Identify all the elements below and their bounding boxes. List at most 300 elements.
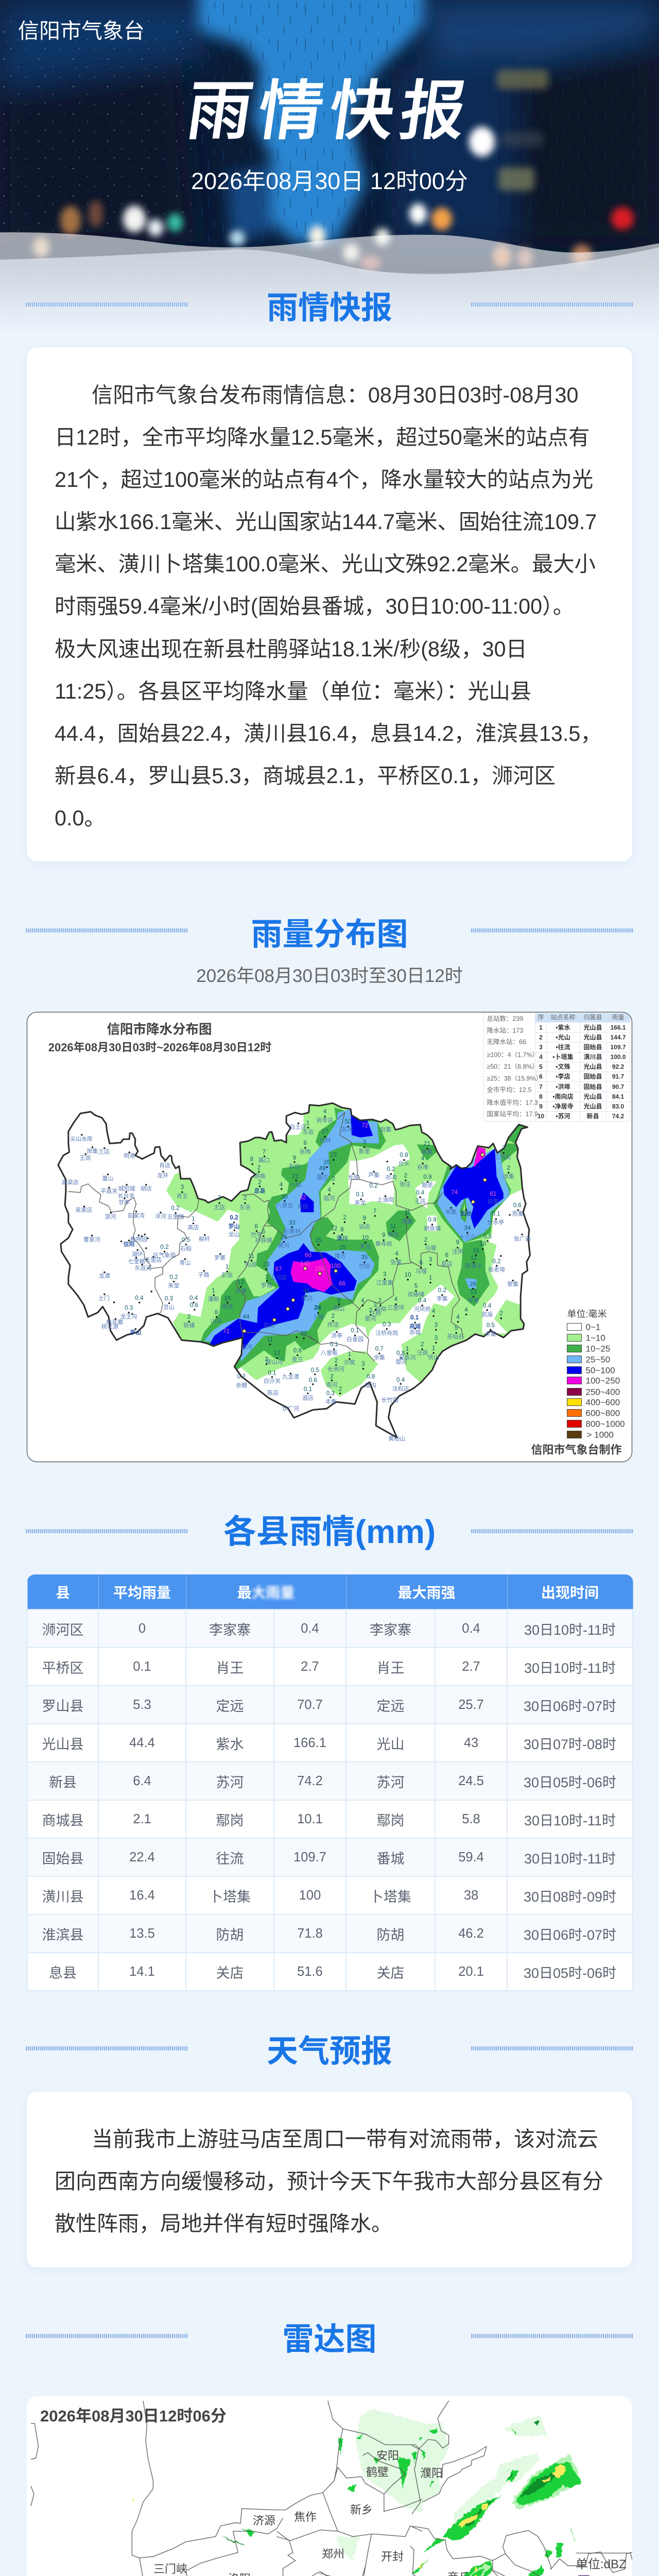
station names: 余集 — [373, 1353, 385, 1361]
station rainfall values: 12 — [331, 1225, 337, 1231]
table: county rainfall: 固始县 — [42, 1851, 83, 1866]
station names: 铁铺 — [183, 1321, 195, 1328]
rainfall legend — [567, 1309, 625, 1439]
table: county rainfall: 74.2 — [297, 1773, 323, 1788]
station rainfall values: 0.8 — [367, 1373, 375, 1380]
station names: 汪岗 — [417, 1349, 428, 1356]
station rainfall values: 0.1 — [410, 1314, 419, 1320]
rain report paragraph: 0.0。 — [55, 806, 106, 830]
station names: 王店 — [414, 1197, 426, 1205]
station names: 苏河 — [241, 1343, 252, 1350]
station names: 城阳城 — [118, 1185, 135, 1192]
rainfall legend: 250~400 — [585, 1387, 620, 1397]
rain report paragraph: 44.4，固始县22.4，潢川县16.4，息县14.2，淮滨县13.5， — [55, 722, 602, 745]
station names: 陈淋子 — [465, 1262, 482, 1269]
station ranking table: 总站数：239 — [487, 1014, 523, 1022]
station names: 张陶 — [299, 1147, 310, 1155]
station rainfall values: 0.7 — [375, 1345, 383, 1352]
station names: 新里 — [358, 1147, 370, 1154]
station rainfall values: 30 — [281, 1193, 288, 1200]
station ranking table: •文殊 — [556, 1062, 570, 1070]
station rainfall values: 4 — [421, 1155, 424, 1162]
station ranking table: 归属县 — [583, 1013, 602, 1021]
station names: 吴家店 — [75, 1206, 92, 1213]
station names: 信阳 — [123, 1240, 134, 1247]
station ranking table: 新县 — [586, 1112, 599, 1120]
station rainfall values: 0.2 — [387, 1165, 395, 1172]
station ranking table: 国家站平均：17.9 — [487, 1110, 537, 1117]
station names: 八里岔 — [276, 1202, 293, 1209]
station ranking table: 光山县 — [583, 1092, 602, 1100]
station names: 南店 — [387, 1231, 398, 1238]
table: county rainfall: 平均雨量 — [113, 1585, 171, 1600]
city labels: 三门峡 — [153, 2563, 187, 2575]
station names: 张广庙 — [514, 1234, 530, 1242]
station ranking table: 4 — [539, 1053, 543, 1060]
station names: 周集 — [402, 1217, 413, 1225]
station ranking table: •往流 — [556, 1043, 570, 1050]
table: county rainfall: 肖王 — [216, 1660, 244, 1675]
station names: 罗寨 — [214, 1254, 226, 1261]
station rainfall values: 8 — [250, 1156, 253, 1162]
station ranking table: 光山县 — [583, 1033, 602, 1041]
station names: 谈店 — [358, 1223, 370, 1230]
table: county rainfall: 30日07时-08时 — [524, 1736, 616, 1752]
heavy rain station markers — [242, 1153, 487, 1332]
station ranking table: 90.7 — [612, 1083, 624, 1090]
table: county rainfall: 大雨量 — [251, 1585, 295, 1600]
station ranking table: 9 — [539, 1103, 543, 1110]
station rainfall values: 12 — [273, 1350, 280, 1357]
station ranking table: 109.7 — [610, 1043, 626, 1050]
station rainfall values: 1 — [348, 1351, 351, 1358]
station rainfall values: 26 — [470, 1281, 476, 1287]
station rainfall values: 3 — [428, 1256, 432, 1263]
station names: 石稻 — [180, 1245, 192, 1251]
rainfall legend: 600~800 — [585, 1408, 620, 1418]
header hero: rainy night background — [0, 0, 659, 315]
rain report paragraph: 11:25）。各县区平均降水量（单位：毫米）：光山县 — [55, 680, 531, 703]
station ranking table: •卜塔集 — [552, 1053, 573, 1060]
table: county rainfall: 苏河 — [377, 1774, 405, 1790]
station rainfall values: 66 — [339, 1280, 345, 1287]
station names: 双椿铺 — [407, 1291, 424, 1298]
table: county rainfall: 出现时间 — [541, 1585, 599, 1600]
station rainfall values: 6 — [303, 1139, 307, 1146]
station names: 洋河 — [154, 1212, 166, 1219]
station ranking table: 固始县 — [583, 1072, 602, 1080]
station rainfall values: 0.9 — [423, 1173, 431, 1180]
station rainfall values: 0.3 — [125, 1304, 133, 1311]
station rainfall values: 100 — [331, 1262, 341, 1269]
station rainfall values: 0.4 — [418, 1297, 426, 1303]
station names: 湖环 — [131, 1250, 143, 1257]
station rainfall values: 0.4 — [135, 1294, 144, 1301]
table: county rainfall: 肖王 — [377, 1660, 405, 1675]
station rainfall values: 50 — [344, 1118, 352, 1125]
station rainfall values: 0.2 — [438, 1286, 446, 1293]
station names: 沙窝 — [343, 1359, 355, 1366]
forecast paragraph — [55, 2127, 603, 2235]
station names: 定远 — [263, 1321, 274, 1329]
station ranking table: 10 — [537, 1112, 544, 1120]
station rainfall values: 4 — [456, 1314, 460, 1320]
station rainfall values: 0.9 — [428, 1216, 436, 1223]
station ranking table — [483, 1013, 630, 1121]
station rainfall values: 0.4 — [189, 1294, 198, 1301]
station rainfall values: 2 — [499, 1310, 502, 1316]
station names: 陡沟 — [365, 1382, 376, 1388]
station rainfall values: 0.1 — [268, 1369, 276, 1376]
station names: 吴陈河 — [398, 1353, 415, 1361]
station rainfall values: 0.6 — [513, 1201, 521, 1208]
station rainfall values: 2 — [187, 1313, 190, 1320]
station ranking table: 固始县 — [583, 1043, 602, 1050]
city labels — [153, 2449, 470, 2576]
table: county rainfall: 定远 — [216, 1698, 244, 1714]
rain report paragraph: 毫米、潢川卜塔集100.0毫米、光山文殊92.2毫米。最大小 — [55, 552, 596, 576]
station ranking table: 雨量 — [612, 1013, 624, 1021]
station rainfall values: 60 — [305, 1252, 311, 1259]
table: county rainfall: 30日06时-07时 — [524, 1927, 616, 1942]
table: county rainfall: 淮滨县 — [42, 1927, 83, 1942]
station rainfall values: 10 — [479, 1241, 486, 1247]
station ranking table: 91.7 — [612, 1073, 624, 1080]
station rainfall values: 1 — [405, 1345, 409, 1352]
table: county rainfall: 苏河 — [216, 1774, 244, 1790]
station names: 关店 — [297, 1202, 308, 1210]
station names: 蒋集 — [421, 1148, 432, 1155]
station names: 汪桥 — [370, 1310, 381, 1316]
station names: 彭黄林 — [283, 1227, 300, 1234]
table: county rainfall: 2.7 — [301, 1659, 319, 1673]
table: county rainfall: 59.4 — [458, 1850, 484, 1864]
station rainfall values: 2 — [258, 1179, 261, 1185]
station rainfall values: 11 — [248, 1252, 254, 1259]
rain report paragraph — [55, 383, 602, 830]
map: county rainfall regions — [58, 1093, 535, 1446]
station rainfall values: 11 — [267, 1336, 273, 1343]
station rainfall values: 0.6 — [189, 1301, 198, 1308]
station names: 肖王 — [176, 1192, 187, 1199]
table: county rainfall: 关店 — [377, 1965, 405, 1980]
agency name: 信阳市气象台 — [18, 19, 145, 43]
station rainfall values: 0.4 — [396, 1376, 405, 1383]
station names: 传流 — [327, 1320, 338, 1328]
table: county rainfall: 紫水 — [216, 1736, 244, 1752]
rainfall legend: 1~10 — [585, 1333, 605, 1343]
station ranking table: 84.1 — [612, 1093, 624, 1100]
panel: forecast text — [27, 2092, 632, 2267]
table: county rainfall: 100 — [299, 1888, 321, 1902]
station names: 罗山 — [228, 1222, 239, 1229]
station ranking table: 2 — [539, 1033, 543, 1041]
station names: 九龙潭 — [282, 1374, 299, 1380]
station ranking table: •李店 — [556, 1072, 570, 1080]
station ranking table: •净居寺 — [552, 1102, 573, 1110]
station rainfall values: 8 — [340, 1226, 343, 1233]
rainfall station markers — [81, 1116, 522, 1397]
station rainfall values: 0.4 — [416, 1189, 424, 1196]
station names: 注阴 — [452, 1247, 463, 1255]
station names: 竹竿 — [250, 1231, 262, 1238]
station rainfall values: 26 — [323, 1159, 330, 1165]
table: county rainfall: 25.7 — [458, 1697, 484, 1711]
rainfall time range subtitle: 2026年08月30日03时至30日12时 — [196, 966, 463, 986]
station names: 游曲 — [254, 1173, 265, 1179]
station names: 黄河 — [278, 1242, 289, 1249]
station names: 上河店 — [270, 1273, 287, 1280]
station ranking table: 光山县 — [583, 1023, 602, 1031]
station rainfall values: 20 — [300, 1330, 307, 1337]
station names: 陈店 — [267, 1388, 279, 1396]
station rainfall values: 0.1 — [330, 1341, 338, 1347]
station names: 震庄 — [317, 1173, 328, 1180]
station names: 徐集 — [502, 1173, 514, 1180]
table: county rainfall: 30日10时-11时 — [524, 1660, 616, 1675]
station rainfall values: 2 — [330, 1373, 333, 1380]
station names: 武庙 — [481, 1310, 493, 1317]
station rainfall values: 3 — [265, 1356, 268, 1363]
station rainfall values: 2 — [217, 1194, 221, 1201]
table: county rainfall: 息县 — [49, 1965, 77, 1980]
station names: 潢川 — [336, 1234, 348, 1241]
table: county rainfall: 0 — [138, 1621, 146, 1635]
station names: 彭张 — [221, 1271, 233, 1278]
station names — [61, 1116, 530, 1442]
station rainfall values: 9 — [381, 1232, 385, 1239]
station rainfall values: 4 — [279, 1181, 283, 1188]
rain report paragraph: 山紫水166.1毫米、光山国家站144.7毫米、固始往流109.7 — [55, 510, 597, 534]
station rainfall values: 7 — [373, 1208, 376, 1214]
station names: 植物园 — [130, 1235, 147, 1242]
rainfall legend: 800~1000 — [585, 1419, 625, 1429]
station rainfall values: 4 — [431, 1308, 435, 1314]
station rainfall values: 24 — [314, 1304, 321, 1311]
station rainfall values: 8 — [214, 1309, 218, 1315]
table: county rainfall: 鄢岗 — [216, 1812, 244, 1828]
station rainfall values: 1 — [428, 1274, 432, 1281]
table: county rainfall: 光山 — [377, 1736, 405, 1752]
station rainfall values: 34 — [464, 1224, 471, 1231]
station ranking table: 166.1 — [610, 1024, 626, 1031]
station ranking table: ≥50：21（8.8%） — [487, 1063, 539, 1070]
station rainfall values — [125, 1108, 521, 1396]
station rainfall values: 9 — [362, 1214, 366, 1221]
station rainfall values: 2 — [334, 1357, 338, 1364]
table: county rainfall: 46.2 — [458, 1926, 484, 1940]
station rainfall values: 0.2 — [230, 1214, 238, 1221]
table: county rainfall: 往流 — [216, 1851, 244, 1866]
table: county rainfall: 43 — [464, 1735, 478, 1750]
station names: 东岳 — [239, 1204, 251, 1210]
station names: 长台关 — [117, 1192, 134, 1199]
station names: 李集 — [436, 1295, 447, 1302]
table: county rainfall: 平桥区 — [42, 1660, 83, 1675]
station names: 游河 — [105, 1213, 116, 1220]
heading: rain report: 雨情快报 — [267, 290, 392, 325]
table: county rainfall: 10.1 — [297, 1811, 323, 1826]
station names: 孙铁铺 — [255, 1236, 272, 1243]
station rainfall values: 7 — [262, 1148, 266, 1155]
chart: rainfall distribution map — [27, 1012, 632, 1462]
station names: 龙潭 — [98, 1273, 110, 1279]
heading: rainfall distribution: 雨量分布图 — [251, 917, 408, 952]
table: county rainfall: 0.4 — [301, 1621, 319, 1635]
station names: 分水亭 — [487, 1218, 504, 1226]
table: county rainfall: 罗山县 — [42, 1698, 83, 1714]
station rainfall values: 0.2 — [237, 1373, 245, 1380]
station rainfall values: 0.2 — [160, 1243, 168, 1250]
station rainfall values: 2 — [501, 1145, 505, 1151]
station names: 法权店 — [392, 1385, 409, 1392]
station names: 汪桥肖岗 — [375, 1329, 398, 1336]
station ranking table: 92.2 — [612, 1063, 624, 1070]
station names: 罗山 — [130, 1329, 141, 1336]
station names: 平昌关 — [100, 1187, 117, 1194]
station rainfall values: 166 — [315, 1265, 324, 1272]
station rainfall values: 24 — [315, 1304, 321, 1311]
table: county rainfall: 30日05时-06时 — [524, 1965, 616, 1980]
station rainfall values: 74 — [451, 1189, 458, 1195]
station names: 谷堆 — [417, 1163, 428, 1170]
station names: 隆古 — [335, 1252, 346, 1259]
station rainfall values: 0.2 — [171, 1205, 179, 1211]
station ranking table: 8 — [539, 1093, 543, 1100]
station rainfall values: 2 — [332, 1175, 335, 1182]
radar legend: dBZ colour bar: 单位:dBZ — [576, 2557, 627, 2571]
station names: 草店 — [441, 1260, 452, 1267]
station names: 高梁店 — [61, 1178, 78, 1185]
province and prefecture boundaries — [31, 2401, 633, 2576]
station rainfall values: 3 — [434, 1321, 438, 1328]
station names: 龙山 — [228, 1231, 239, 1238]
station rainfall values: 0.1 — [351, 1327, 359, 1334]
station ranking table: ≥25：38（15.9%） — [487, 1075, 542, 1082]
station rainfall values: 3 — [383, 1270, 386, 1277]
station rainfall values: 35 — [361, 1254, 368, 1261]
station names: 桃林 — [319, 1136, 331, 1143]
station rainfall values: 10 — [404, 1272, 411, 1278]
station names: 邢集 — [86, 1147, 98, 1155]
station rainfall values: 25 — [339, 1244, 346, 1250]
station names: 桃花源 — [101, 1323, 118, 1330]
rain report paragraph: 日12时，全市平均降水量12.5毫米，超过50毫米的站点有 — [55, 426, 589, 449]
station names: 台头 — [398, 1160, 409, 1167]
heading: radar: 雷达图 — [282, 2321, 377, 2357]
table: county rainfall: 6.4 — [133, 1773, 151, 1788]
station rainfall values: 11 — [390, 1223, 396, 1229]
station names: 长洲河 — [327, 1366, 344, 1372]
station names: 黄柏山 — [388, 1434, 405, 1442]
station rainfall values: 0.3 — [383, 1321, 391, 1328]
station names: 赵集 — [380, 1126, 391, 1133]
station rainfall values: 12 — [237, 1279, 244, 1285]
table: county rainfall: 20.1 — [458, 1964, 484, 1978]
rainfall legend: 50~100 — [585, 1365, 615, 1375]
station names: 龙王沟 — [120, 1313, 137, 1319]
station rainfall values: 0.3 — [164, 1295, 172, 1302]
station rainfall values: 25 — [315, 1236, 322, 1243]
station rainfall values: 0.1 — [303, 1386, 311, 1393]
station ranking table: 74.2 — [612, 1112, 624, 1120]
station names: 十三小 — [459, 1233, 476, 1240]
station rainfall values: 72 — [361, 1122, 368, 1128]
station names: 河凤桥 — [413, 1306, 430, 1312]
table: county rainfall: 14.1 — [129, 1964, 155, 1978]
station names: 陡山河 — [266, 1358, 283, 1365]
station rainfall values: 4 — [361, 1297, 365, 1303]
station names: 桃花寨 — [106, 1318, 123, 1326]
table: county rainfall: 30日10时-11时 — [524, 1812, 616, 1828]
station names: 白土店 — [289, 1123, 306, 1130]
station ranking table: 降水站：173 — [487, 1027, 523, 1034]
rain report paragraph: 极大风速出现在新县杜鹃驿站18.1米/秒(8级，30日 — [55, 637, 527, 661]
station rainfall values: 2 — [257, 1164, 261, 1171]
station rainfall values: 2 — [243, 1194, 247, 1201]
issue date: 2026年08月30日 12时00分 — [191, 168, 468, 194]
station rainfall values: 145 — [300, 1260, 310, 1267]
station names: 白沙关 — [264, 1377, 280, 1384]
table: county rainfall: 最大雨强 — [397, 1585, 456, 1600]
station rainfall values: 0.8 — [293, 1347, 301, 1353]
station names: 三里坪 — [387, 1304, 404, 1311]
radar timestamp: 2026年08月30日12时06分 — [40, 2407, 227, 2425]
station names: 黄寺岗 — [375, 1240, 392, 1247]
station names: 甘岸 — [118, 1198, 130, 1205]
chart: radar map — [27, 2396, 632, 2576]
table: county rainfall: 5.3 — [133, 1697, 151, 1711]
station rainfall values: 46 — [303, 1287, 309, 1294]
city labels: 焦作 — [294, 2511, 317, 2523]
station rainfall values: 27 — [321, 1128, 328, 1135]
table: county rainfall: 0.4 — [462, 1621, 480, 1635]
station rainfall values: 44 — [242, 1313, 249, 1320]
station names: 张老埠 — [488, 1265, 505, 1273]
table: county rainfall: 番城 — [377, 1851, 405, 1866]
station rainfall values: 13 — [470, 1289, 476, 1295]
station rainfall values: 15 — [473, 1247, 479, 1254]
station names: 柳杆 — [199, 1235, 210, 1242]
station rainfall values: 0.8 — [396, 1350, 405, 1357]
station rainfall values: 2 — [507, 1164, 510, 1171]
station names: 五里店 — [145, 1256, 162, 1263]
station names: 山店 — [211, 1316, 222, 1324]
city labels: 开封 — [381, 2550, 404, 2563]
map date range: 2026年08月30日03时~2026年08月30日12时 — [48, 1041, 271, 1054]
station ranking table: 1 — [539, 1024, 543, 1031]
station ranking table: 全市平均：12.5 — [487, 1086, 531, 1093]
table: county rainfall: 44.4 — [129, 1735, 155, 1750]
station rainfall values: 0.2 — [169, 1274, 178, 1280]
station names: 胡店 — [140, 1184, 151, 1192]
main title: 雨情快报 — [182, 75, 477, 147]
station names: 息县 — [254, 1187, 265, 1194]
rain report paragraph: 新县6.4，罗山县5.3，商城县2.1，平桥区0.1，浉河区 — [55, 764, 556, 788]
table: county rainfall: 166.1 — [293, 1735, 326, 1750]
station rainfall values: 61 — [490, 1191, 496, 1197]
station rainfall values: 71 — [223, 1328, 229, 1334]
station rainfall values: 1 — [431, 1345, 435, 1351]
station names: 东双河 — [134, 1265, 151, 1272]
station names: 胡族铺 — [424, 1224, 440, 1231]
station ranking table: 光山县 — [583, 1102, 602, 1110]
station names: 卜塔 — [312, 1313, 323, 1320]
station rainfall values: 2 — [404, 1172, 407, 1179]
station names: 马堰 — [415, 1268, 426, 1275]
station rainfall values: 1 — [225, 1263, 229, 1270]
station rainfall values: 0.1 — [492, 1210, 500, 1217]
